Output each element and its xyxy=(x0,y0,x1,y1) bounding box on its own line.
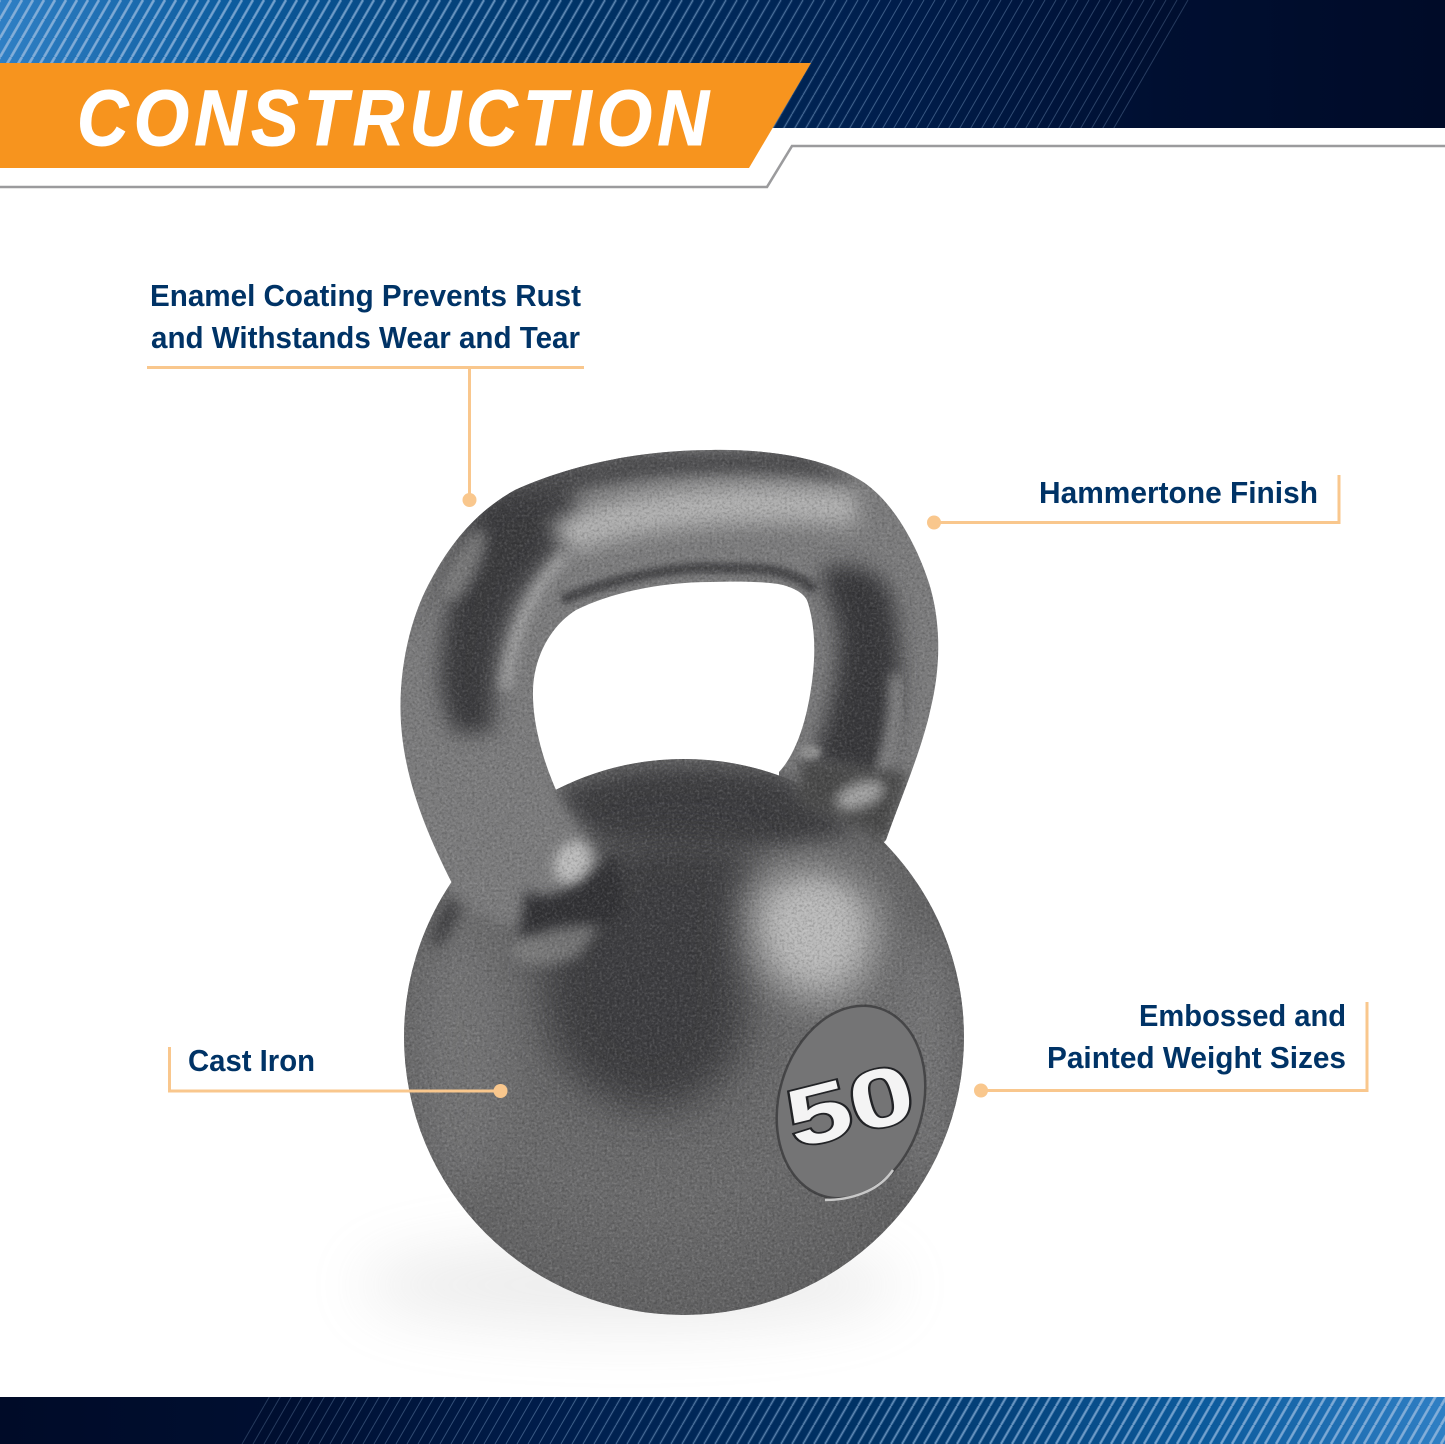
callout: enamel coating xyxy=(147,278,584,507)
ball shading xyxy=(415,745,957,1190)
header band xyxy=(0,0,1445,128)
callout: hammertone finish: Hammertone Finish xyxy=(1039,475,1318,510)
title banner: CONSTRUCTION xyxy=(77,74,710,162)
handle shading xyxy=(402,450,900,780)
ball body xyxy=(404,759,964,1315)
weight number: 50 xyxy=(777,1047,923,1166)
callout: embossed weight sizes: Painted Weight Sizes xyxy=(1047,1040,1346,1075)
callout: enamel coating: and Withstands Wear and Tear xyxy=(151,320,580,355)
hammertone texture xyxy=(395,445,970,1320)
callout: hammertone finish xyxy=(927,475,1339,530)
callout: cast iron xyxy=(170,1043,508,1098)
kettlebell photo illustration xyxy=(395,445,970,1320)
callout: embossed weight sizes: Embossed and xyxy=(1139,998,1346,1033)
embossed disc xyxy=(776,1004,926,1202)
header grey outline xyxy=(0,146,1445,187)
callout: enamel coating: Enamel Coating Prevents Rust xyxy=(150,278,581,313)
title banner xyxy=(0,63,811,168)
footer band xyxy=(0,1397,1445,1444)
kettlebell shadow xyxy=(360,1240,900,1330)
left leg flowing into ball xyxy=(440,775,602,925)
callout: embossed weight sizes xyxy=(974,998,1367,1098)
callout: cast iron: Cast Iron xyxy=(188,1043,315,1078)
